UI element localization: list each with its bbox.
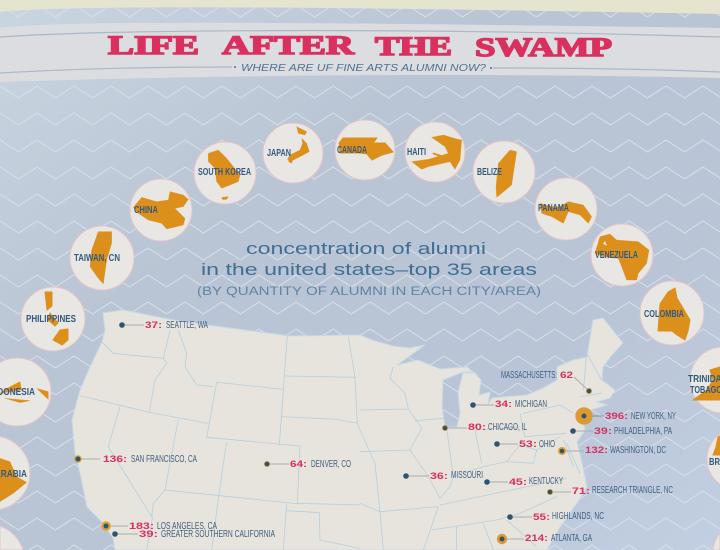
point: research triangle xyxy=(547,485,673,496)
circle: china: CHINA xyxy=(134,204,158,216)
circle: south korea xyxy=(194,142,256,204)
map data points xyxy=(74,320,676,544)
point: philadelphia: PHILADELPHIA, PA xyxy=(614,426,672,437)
point: atlanta: 214: xyxy=(525,533,548,543)
point: kentucky: KENTUCKY xyxy=(529,476,563,487)
point: san francisco: 136: xyxy=(103,454,127,464)
point: denver: DENVER, CO xyxy=(311,459,351,470)
point: kentucky: 45: xyxy=(509,477,527,487)
title banner xyxy=(0,23,720,82)
point: new york xyxy=(575,407,676,425)
subtitle: WHERE ARE UF FINE ARTS ALUMNI NOW? xyxy=(241,62,486,74)
point: highlands xyxy=(507,511,604,522)
point: los angeles: 183: xyxy=(129,521,154,531)
circle: taiwan: TAIWAN, CN xyxy=(74,252,120,264)
circle: china xyxy=(130,179,192,241)
point: chicago xyxy=(442,422,527,433)
country circles arc xyxy=(0,120,720,550)
circle: venezuela xyxy=(591,224,653,286)
point: seattle: SEATTLE, WA xyxy=(166,320,208,331)
point: atlanta xyxy=(497,533,592,544)
point: research triangle: 71: xyxy=(572,486,590,496)
map heading: in the united states–top 35 areas xyxy=(201,260,537,279)
point: missouri: MISSOURI xyxy=(451,470,483,481)
circle: trinidad and tobago xyxy=(688,347,720,413)
map heading: (BY QUANTITY OF ALUMNI IN EACH CITY/AREA) xyxy=(197,286,541,298)
title: AFTER xyxy=(222,31,354,60)
point: highlands: 55: xyxy=(533,512,550,522)
point: massachusetts xyxy=(501,370,592,394)
point: chicago: CHICAGO, IL xyxy=(488,422,527,433)
point: ohio xyxy=(494,439,555,450)
point: massachusetts: MASSACHUSETTS: xyxy=(501,370,557,381)
circle: belize xyxy=(473,141,535,203)
title xyxy=(108,31,612,62)
point: denver: 64: xyxy=(290,459,307,469)
point: michigan: 34: xyxy=(495,399,512,409)
circle: panama: PANAMA xyxy=(538,202,569,214)
point: chicago: 80: xyxy=(468,422,486,432)
map of the united states xyxy=(72,310,623,550)
point: philadelphia xyxy=(570,426,672,437)
point: washington dc: 132: xyxy=(585,445,608,455)
point: washington dc: WASHINGTON, DC xyxy=(610,445,666,456)
circle: venezuela: VENEZUELA xyxy=(595,249,638,261)
point: atlanta: ATLANTA, GA xyxy=(551,533,592,544)
point: greater southern california xyxy=(112,529,275,540)
point: los angeles: LOS ANGELES, CA xyxy=(157,521,217,532)
circle: brazil xyxy=(707,428,720,490)
circle: indonesia xyxy=(0,358,51,426)
point: san francisco xyxy=(74,454,197,465)
point: massachusetts: 62 xyxy=(560,370,573,380)
point: ohio: OHIO xyxy=(539,439,555,450)
point: michigan: MICHIGAN xyxy=(515,399,547,410)
circle: saudi arabia xyxy=(0,436,30,510)
map heading xyxy=(197,239,541,298)
circle: panama xyxy=(535,178,597,240)
point: michigan xyxy=(470,399,547,410)
point: ohio: 53: xyxy=(519,439,537,449)
circle: japan xyxy=(263,123,323,183)
point: kentucky xyxy=(484,476,563,487)
point: seattle: 37: xyxy=(145,320,162,330)
circle: haiti xyxy=(405,122,465,182)
point: new york: 396: xyxy=(605,411,628,421)
circle: philippines xyxy=(21,287,85,351)
point: missouri xyxy=(403,470,483,481)
title: THE xyxy=(375,32,452,61)
point: greater southern california: GREATER SOUTHERN CALIFORNIA xyxy=(161,529,275,540)
point: washington dc xyxy=(558,445,666,456)
circle: lower left xyxy=(0,526,23,550)
circle: south korea: SOUTH KOREA xyxy=(198,166,251,178)
point: research triangle: RESEARCH TRIANGLE, NC xyxy=(592,485,673,496)
circle: philippines: PHILIPPINES xyxy=(26,313,76,325)
point: philadelphia: 39: xyxy=(594,426,612,436)
circle: lower right xyxy=(713,533,720,550)
circle: taiwan xyxy=(70,226,134,290)
title: SWAMP xyxy=(475,33,612,62)
circle: colombia: COLOMBIA xyxy=(644,308,684,320)
circle: belize: BELIZE xyxy=(477,166,502,178)
circle: japan: JAPAN xyxy=(267,147,291,159)
point: los angeles xyxy=(101,521,217,532)
point: san francisco: SAN FRANCISCO, CA xyxy=(131,454,197,465)
point: seattle xyxy=(119,320,208,331)
title: LIFE xyxy=(108,31,199,60)
circle: colombia xyxy=(640,281,704,345)
point: highlands: HIGHLANDS, NC xyxy=(552,511,604,522)
circle: haiti: HAITI xyxy=(407,146,426,158)
point: new york: NEW YORK, NY xyxy=(631,411,676,422)
point: greater southern california: 39: xyxy=(139,529,158,539)
map heading: concentration of alumni xyxy=(246,239,486,258)
circle: canada xyxy=(335,120,395,180)
point: denver xyxy=(264,459,351,470)
circle: canada: CANADA xyxy=(337,144,367,156)
point: missouri: 36: xyxy=(430,471,448,481)
